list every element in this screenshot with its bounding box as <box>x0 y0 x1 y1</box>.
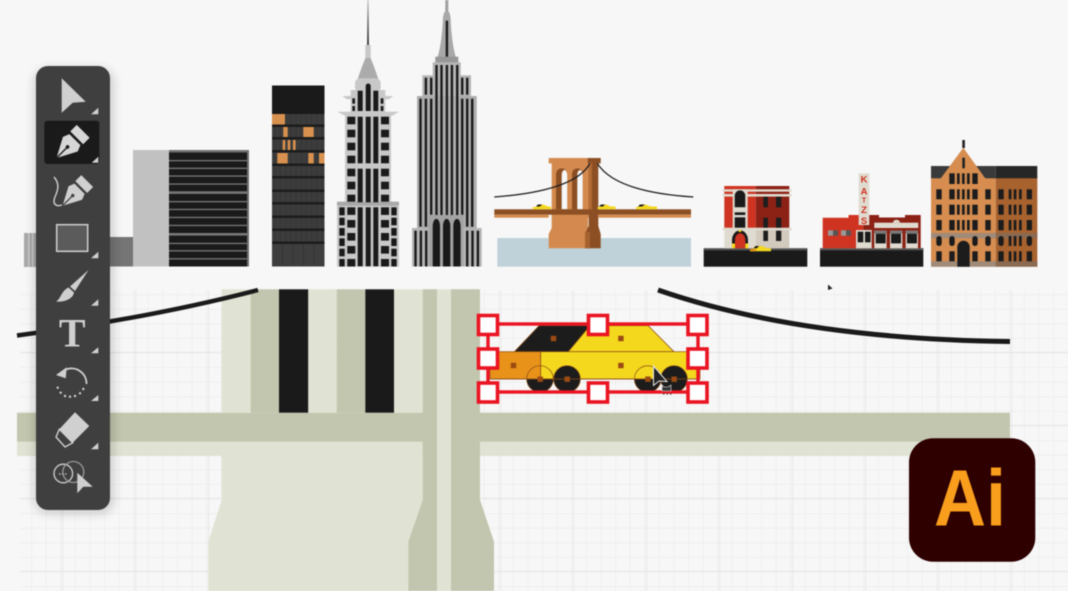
road <box>17 413 1010 456</box>
skyline row <box>24 0 1037 267</box>
tower <box>549 158 601 248</box>
selected taxi <box>478 316 707 402</box>
building: low grey block <box>24 233 133 267</box>
small cursor mark <box>828 284 832 290</box>
cable right <box>658 290 1010 342</box>
sign: S <box>861 216 867 227</box>
tool: rotate <box>56 367 87 398</box>
water <box>497 238 691 267</box>
sign: A <box>861 186 868 198</box>
building: striped office block <box>133 150 249 266</box>
tool: shaper <box>54 462 93 493</box>
Adobe Illustrator logo <box>909 438 1035 562</box>
landmark: Brooklyn Bridge <box>494 158 693 267</box>
enlarged bridge artwork <box>17 289 1010 591</box>
toolbar shadow <box>34 68 114 514</box>
tool: eraser <box>56 412 89 447</box>
taxi <box>636 204 657 209</box>
sign: T <box>862 198 867 204</box>
tower upper columns <box>222 289 423 413</box>
tool: curvature pen <box>54 174 94 213</box>
tool: type: T <box>59 311 86 356</box>
tool: pen <box>49 124 91 165</box>
toolbar <box>36 66 110 510</box>
Adobe Illustrator logo: Ai <box>934 453 1006 542</box>
building: Empire State tower <box>412 0 482 266</box>
selection handles <box>478 316 707 402</box>
tower shaded pillars <box>408 289 494 591</box>
artboard grid <box>20 290 1068 591</box>
cable left <box>17 290 258 336</box>
sign <box>859 173 869 227</box>
selection box <box>488 324 698 392</box>
tool group corner markers <box>91 108 98 449</box>
sign: K <box>861 174 868 186</box>
tool: paintbrush <box>56 270 88 302</box>
taxi <box>598 204 616 209</box>
cables <box>494 163 693 197</box>
tower lower light face <box>208 456 423 591</box>
landmark: brick gabled building <box>931 140 1037 267</box>
building: dark tower with lit windows <box>272 86 324 266</box>
road deck <box>494 209 691 215</box>
taxi <box>533 204 551 209</box>
taxi shapes <box>490 326 700 392</box>
landmark: Katz's deli <box>820 173 923 267</box>
tool: rectangle <box>57 225 88 251</box>
sign: Z <box>861 205 867 216</box>
toolbar panel <box>36 66 110 510</box>
tool: selection arrow <box>62 78 86 113</box>
taxi <box>750 246 771 251</box>
active tool highlight <box>44 121 99 164</box>
landmark: red firehouse <box>704 186 807 267</box>
building: Chrysler tower <box>337 0 399 267</box>
anchor points <box>511 336 677 382</box>
mouse cursor <box>654 366 672 394</box>
